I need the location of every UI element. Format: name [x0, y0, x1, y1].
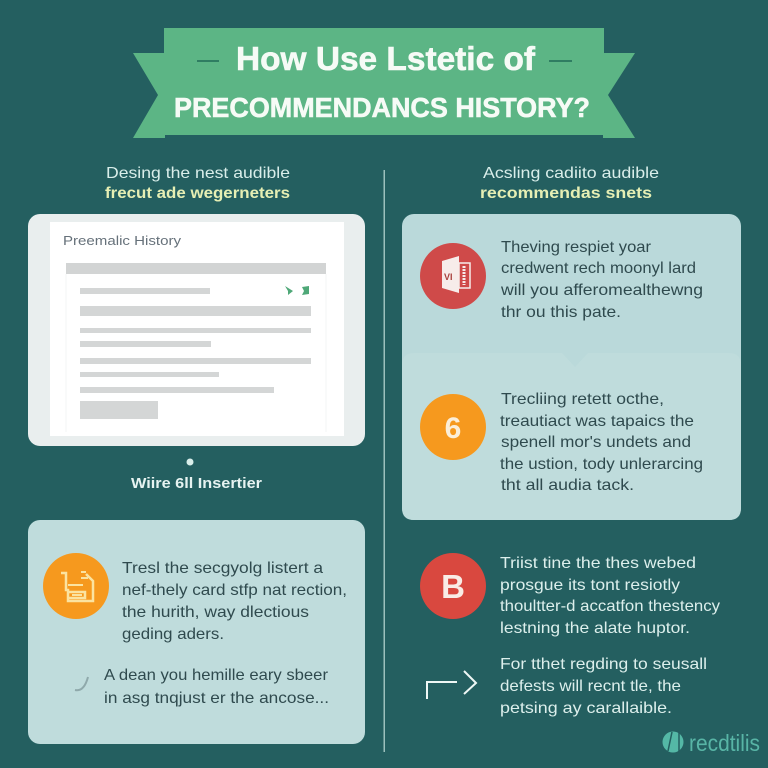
icon: orange document: [43, 553, 109, 619]
white page: [50, 222, 344, 436]
upper card text: [500, 239, 703, 321]
lower card text: spenell mor's undets and: [501, 434, 691, 451]
center divider: [384, 170, 385, 752]
title dash right: [549, 60, 572, 62]
right section text lower: petsing ay carallaible.: [500, 700, 672, 717]
header bar: [66, 263, 326, 274]
card text lower: [104, 667, 329, 707]
card background upper: [402, 214, 741, 520]
arrow: [427, 671, 476, 699]
icon: red letter B: B: [441, 568, 465, 605]
title banner: [133, 28, 635, 138]
lower card text: treautiact was tapaics the: [500, 413, 694, 430]
title dash left: [197, 60, 219, 62]
lower card text: [500, 391, 703, 494]
right section text upper: [500, 555, 720, 637]
lower card text: tht all audia tack.: [501, 477, 634, 494]
panel: right stacked card: [402, 214, 741, 520]
icon: orange number: 6: [445, 412, 461, 445]
screen title: Preemalic History: [63, 233, 182, 248]
right section text upper: prosgue its tont resiotly: [500, 577, 680, 594]
upper card text: credwent rech moonyl lard: [501, 260, 696, 277]
upper card text: Theving respiet yoar: [501, 239, 652, 256]
right section text upper: thoultter-d accatfon thestency: [500, 598, 720, 615]
panel: history screen mockup: [28, 214, 365, 446]
card text upper: Tresl the secgyolg listert a: [122, 560, 323, 577]
card text upper: geding aders.: [122, 626, 224, 643]
icon: faint check: [75, 677, 88, 690]
right section text lower: [500, 656, 707, 717]
card text lower: A dean you hemille eary sbeer: [104, 667, 329, 684]
banner ribbon shape: [133, 28, 635, 138]
title line 1: How Use Lstetic of: [236, 40, 536, 77]
tablet frame: [28, 214, 365, 446]
logo mark slit: [668, 732, 679, 751]
title line 2: PRECOMMENDANCS HISTORY?: [174, 92, 590, 123]
icon: orange number: [420, 394, 486, 460]
left heading line 2: frecut ade wegerneters: [105, 185, 290, 202]
right section text upper: Triist tine the thes webed: [500, 555, 696, 572]
left column heading: [105, 165, 290, 202]
logo: [662, 730, 760, 756]
logo wordmark: recdtilis: [689, 730, 760, 756]
upper card text: will you afferomealthewng: [500, 282, 703, 299]
right heading line 2: recommendas snets: [480, 185, 652, 202]
right heading line 1: Acsling cadiito audible: [483, 165, 659, 182]
card text lower: in asg tnqjust er the ancose...: [104, 690, 329, 707]
card text upper: the hurith, way dlectious: [122, 604, 309, 621]
lower card text: the ustion, tody unlerarcing: [500, 456, 703, 473]
upper card text: thr ou this pate.: [501, 304, 621, 321]
left heading line 1: Desing the nest audible: [106, 165, 290, 182]
table outline: [66, 274, 326, 432]
lower section with notch: [402, 353, 741, 520]
green row markers: [285, 286, 309, 295]
icon: red document: VI: [444, 272, 453, 282]
left caption: Wiire 6ll Insertier: [131, 476, 262, 492]
right column heading: [480, 165, 659, 202]
right section text lower: For tthet regding to seusall: [500, 656, 707, 673]
right section text upper: lestning the alate huptor.: [500, 620, 690, 637]
logo mark: [662, 732, 684, 752]
card text upper: nef-thely card stfp nat rection,: [122, 582, 347, 599]
card text upper: [122, 560, 347, 643]
content rows: [80, 288, 311, 419]
caption dot: [186, 458, 194, 466]
right section text lower: defests will recnt tle, the: [500, 678, 681, 695]
icon: red letter B: [420, 553, 486, 619]
icon: red document: [420, 243, 486, 309]
panel: left tip card: [28, 520, 365, 744]
lower card text: Trecliing retett octhe,: [501, 391, 664, 408]
card background: [28, 520, 365, 744]
